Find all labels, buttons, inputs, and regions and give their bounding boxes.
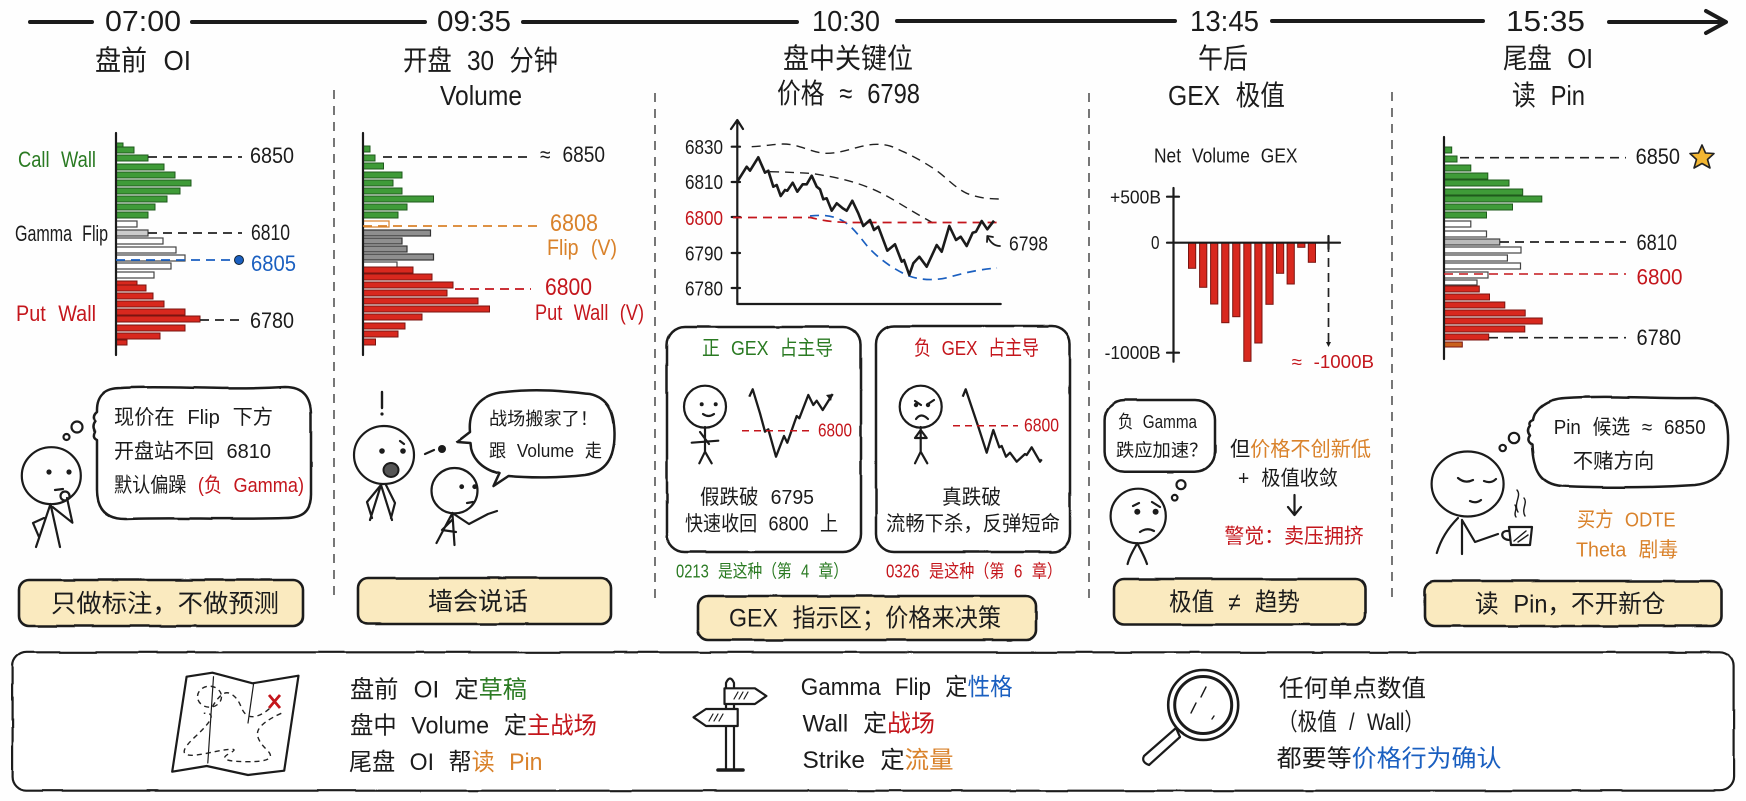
card caption [886, 486, 1060, 536]
card caption: 真跌破 [942, 486, 1001, 509]
level 6780: 6780 [250, 308, 294, 333]
chart: Net Volume GEX bars [1105, 145, 1374, 372]
panel: 07:00 pre-market OI [15, 45, 311, 626]
level 6780 [200, 308, 294, 333]
timeline with time labels and arrow: 13:45 [1190, 6, 1259, 38]
chart: OI histogram [116, 133, 200, 355]
heading: pre-market OI: 盘前 OI [95, 45, 191, 76]
level 6800 Put Wall (V): 6800 [545, 274, 592, 301]
chart: true breakdown [953, 389, 1059, 462]
icon: coffee cup [1502, 490, 1532, 545]
chart: Net Volume GEX bars: -1000B [1105, 343, 1161, 363]
heading: GEX extreme: GEX 极值 [1168, 80, 1285, 111]
level 6800 Put Wall (V): Put Wall (V) [535, 300, 644, 325]
chart: Volume histogram [363, 133, 490, 355]
timeline with time labels and arrow: 15:35 [1506, 6, 1585, 38]
takeaway pill [19, 580, 303, 626]
takeaway pill: 读 Pin，不开新仓 [1475, 591, 1665, 619]
text: Flip Wall Strike rules: Wall 定战场 [802, 711, 935, 738]
chart: false breakdown: 6800 [818, 421, 852, 441]
text: confirm with price action: 都要等价格行为确认 [1277, 746, 1502, 773]
chart: price line with key levels: 6798 [1009, 233, 1048, 256]
card caption: 快速收回 6800 上 [685, 513, 838, 536]
timeline with time labels and arrow: 09:35 [437, 6, 511, 38]
text: OI and Volume rules: 盘前 OI 定草稿 [350, 676, 527, 703]
chart: true breakdown: 6800 [1024, 416, 1059, 436]
takeaway pill: 墙会说话 [428, 588, 528, 616]
thought bubble: 负 Gamma [1118, 412, 1198, 432]
character: calm person with coffee [1432, 452, 1532, 554]
thought bubble [1500, 397, 1728, 487]
level 6810: 6810 [251, 220, 290, 245]
note: buyers ODTE Theta: 买方 ODTE [1577, 509, 1676, 532]
card caption: 流畅下杀，反弹短命 [886, 513, 1060, 536]
takeaway pill [1114, 579, 1366, 624]
takeaway pill [358, 578, 611, 624]
annotation text [1224, 438, 1371, 548]
text: Flip Wall Strike rules [801, 674, 1013, 774]
panel: 09:35 opening 30 minutes Volume [354, 45, 644, 624]
takeaway pill [1425, 581, 1722, 626]
card title: 正 GEX 占主导 [702, 337, 833, 360]
chart: false breakdown [742, 389, 852, 457]
card: positive GEX dominant [667, 327, 861, 552]
speech bubble: 战场搬家了！ [489, 409, 598, 429]
heading: price approx 6798: 价格 ≈ 6798 [777, 78, 920, 109]
card caption [685, 486, 838, 536]
text: Flip Wall Strike rules: Gamma Flip 定性格 [801, 674, 1013, 701]
level 6850 with star [1460, 144, 1714, 169]
takeaway pill [698, 596, 1036, 640]
character: worried person [1111, 489, 1166, 564]
annotation text: + 极值收敛 [1238, 467, 1338, 490]
timeline with time labels and arrow: 10:30 [812, 6, 880, 38]
speech bubble: 跟 Volume 走 [489, 441, 602, 461]
thought bubble [64, 387, 311, 519]
level 6805: 6805 [251, 251, 296, 276]
chart: Net Volume GEX bars: +500B [1110, 187, 1161, 207]
card caption: 假跌破 6795 [700, 486, 814, 509]
label: Put Wall: Put Wall [16, 301, 96, 326]
icon: treasure map [172, 673, 298, 775]
text: Flip Wall Strike rules: Strike 定流量 [802, 747, 954, 774]
text: OI and Volume rules: 尾盘 OI 帮读 Pin [349, 749, 542, 776]
panel: 13:45 afternoon GEX extreme [1105, 43, 1374, 624]
level 6810: 6810 [1636, 230, 1677, 255]
thought bubble: Pin 候选 ≈ 6850 [1554, 416, 1706, 439]
heading: afternoon: 午后 [1198, 43, 1248, 74]
text: confirm with price action: 任何单点数值 [1279, 676, 1426, 703]
panel: bottom summary [13, 652, 1734, 791]
thought bubble: 开盘站不回 6810 [114, 440, 271, 463]
chart: closing OI histogram [1444, 137, 1542, 359]
panel: 15:35 closing OI read Pin [1425, 43, 1728, 626]
text: OI and Volume rules: 盘中 Volume 定主战场 [350, 712, 597, 739]
level 6800 Put Wall (V) [455, 274, 644, 325]
text: confirm with price action: （极值 / Wall） [1278, 709, 1424, 736]
level 6800: 6800 [1636, 264, 1682, 289]
level 6780: 6780 [1636, 325, 1681, 350]
takeaway pill: 极值 ≠ 趋势 [1169, 589, 1300, 617]
note: 0326 chapter 6: 0326 是这种（第 6 章） [886, 562, 1062, 582]
level 6805 [116, 251, 296, 276]
heading: opening 30 minutes: 开盘 30 分钟 [403, 45, 558, 76]
icon: smiling person [684, 386, 726, 463]
thought bubble [1105, 400, 1215, 501]
card: negative GEX dominant [876, 326, 1070, 552]
chart: Net Volume GEX bars: 0 [1151, 233, 1160, 253]
level 6808 Flip (V): 6808 [550, 210, 598, 237]
heading: read Pin: 读 Pin [1512, 80, 1585, 111]
level 6850: 6850 [250, 143, 294, 168]
speech bubble [457, 390, 615, 486]
heading: Volume: Volume [440, 80, 522, 111]
heading: midday key level: 盘中关键位 [783, 43, 913, 74]
chart: price line with key levels: 6810 [685, 171, 723, 194]
chart: price line with key levels [685, 120, 1048, 304]
label: Gamma Flip: Gamma Flip [15, 221, 108, 246]
card title: 负 GEX 占主导 [914, 337, 1039, 360]
thought bubble: 默认偏躁 (负 Gamma) [114, 474, 304, 497]
chart: price line with key levels: 6800 [685, 207, 723, 230]
thought bubble: 现价在 Flip 下方 [114, 406, 273, 429]
icon: angry person [900, 386, 942, 463]
note: buyers ODTE Theta: Theta 剧毒 [1576, 539, 1678, 562]
panel: 10:30 midday key level [667, 43, 1070, 640]
timeline with time labels and arrow: 07:00 [105, 6, 181, 38]
note: buyers ODTE Theta [1576, 509, 1678, 562]
chart: Net Volume GEX bars: ≈ -1000B [1292, 352, 1374, 372]
text: confirm with price action [1277, 676, 1502, 773]
chart: Net Volume GEX bars: Net Volume GEX [1154, 145, 1298, 168]
annotation text: 但价格不创新低 [1230, 438, 1371, 461]
heading: closing OI: 尾盘 OI [1503, 43, 1593, 74]
level 6808 Flip (V) [363, 210, 617, 260]
level 6808 Flip (V): Flip (V) [547, 235, 617, 260]
takeaway pill: GEX 指示区；价格来决策 [729, 605, 1001, 633]
character: pointing person [432, 468, 497, 545]
character: surprised person [354, 392, 446, 520]
chart: price line with key levels: 6780 [685, 278, 723, 301]
text: OI and Volume rules [349, 676, 597, 776]
timeline with time labels and arrow [30, 6, 1726, 38]
chart: price line with key levels: 6790 [685, 243, 723, 266]
annotation text: 警觉：卖压拥挤 [1224, 525, 1364, 548]
chart: price line with key levels: 6830 [685, 136, 723, 159]
icon: star [1690, 145, 1714, 168]
icon: signpost [694, 678, 766, 770]
note: 0213 chapter 4: 0213 是这种（第 4 章） [676, 562, 848, 582]
level 6850 with star: 6850 [1636, 144, 1680, 169]
column separators [334, 90, 1392, 602]
level approx 6850: ≈ 6850 [540, 142, 605, 167]
icon: magnifying glass [1143, 670, 1238, 765]
thought bubble: 跌应加速？ [1116, 441, 1207, 461]
thought bubble: 不赌方向 [1573, 450, 1654, 473]
takeaway pill: 只做标注，不做预测 [51, 590, 279, 618]
character: thinking person [22, 447, 81, 547]
label: Call Wall: Call Wall [18, 147, 96, 172]
